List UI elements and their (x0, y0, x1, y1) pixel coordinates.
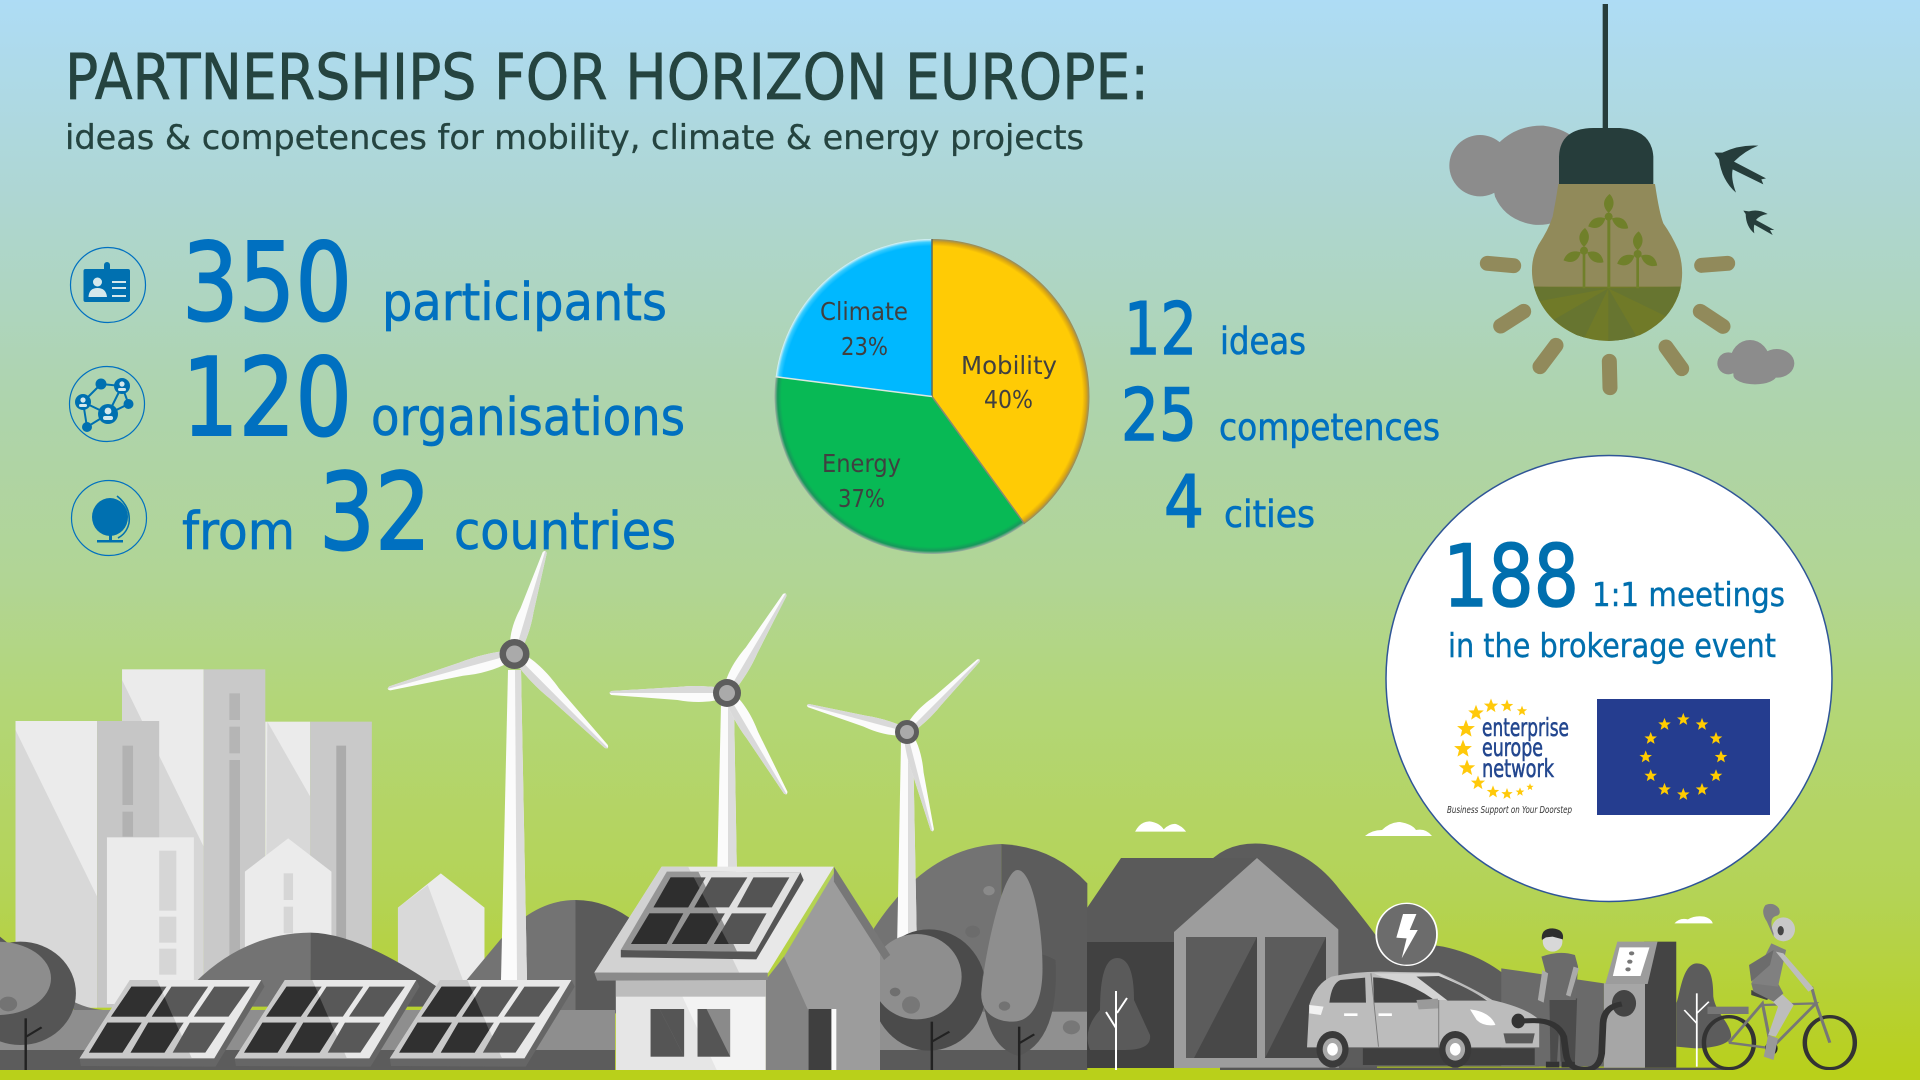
ground line (1220, 1068, 1724, 1070)
stat: 25 competences: competences (1219, 406, 1440, 449)
label: energy: 37% (838, 484, 885, 513)
logo: enterprise europe network: network (1482, 754, 1554, 783)
flag: European Union (1597, 699, 1770, 815)
stat: 120 organisations: organisations (371, 388, 685, 448)
stat: 350 participants: participants (382, 273, 667, 333)
hill: middle (465, 900, 637, 1013)
label: mobility: Mobility (961, 351, 1057, 380)
barn doors (1186, 937, 1326, 1058)
house door (809, 1009, 836, 1070)
stat: from 32 countries: 32 (319, 451, 431, 574)
stat: 12 ideas: ideas (1220, 320, 1306, 363)
barn dark block (1087, 858, 1260, 1070)
stat: from 32 countries: from (182, 502, 295, 562)
bicycle and cyclist (1704, 904, 1855, 1069)
solar panel 2 (235, 980, 420, 1067)
solar panel 3 (390, 980, 575, 1067)
cord (1603, 4, 1608, 129)
label: climate (820, 297, 908, 361)
stat: 188 meetings: 1:1 meetings (1592, 575, 1785, 614)
hill: left (73, 933, 437, 1013)
bulb light rays (1487, 263, 1728, 388)
building: right (265, 722, 372, 988)
wind turbine 2 (609, 588, 795, 880)
car (1307, 972, 1539, 1068)
label: energy (822, 449, 901, 513)
bulb cap (1559, 128, 1653, 184)
icon: organisations network (70, 366, 144, 442)
wind turbine 3 (805, 654, 984, 950)
swallow large (1714, 145, 1766, 193)
cloud: white small right (1674, 916, 1713, 923)
label: climate: 23% (841, 332, 888, 361)
slice: climate (776, 239, 932, 396)
illustration: house with roof solar panel and trees (594, 821, 1186, 1070)
plug (1512, 1014, 1525, 1028)
bulb windmills (1562, 194, 1660, 288)
building: tall centre (122, 669, 265, 1003)
icon: globe (72, 480, 146, 556)
cloud: white small centre (1135, 821, 1186, 832)
hill: behind car (1338, 891, 1539, 1067)
barn gable (1174, 858, 1339, 1068)
subtitle: ideas & competences for mobility, climate & energy projects (65, 118, 1084, 158)
illustration: city skyline and solar panels (0, 669, 637, 1070)
stat: 12 ideas (1124, 287, 1306, 371)
logo: enterprise europe network: enterprise (1482, 713, 1569, 742)
ground bands (0, 1010, 615, 1070)
logo: enterprise europe network: Business Support on Your Doorstep (1447, 805, 1572, 816)
stat: from 32 countries (182, 451, 676, 574)
stat: 188 meetings: 188 (1443, 527, 1579, 627)
stat: 12 ideas: 12 (1124, 287, 1197, 371)
cloud: small grey (1717, 340, 1794, 384)
stat: 25 competences: 25 (1121, 373, 1197, 457)
stat: 4 cities (1164, 460, 1315, 544)
charging cable (1519, 1004, 1622, 1069)
bush and sapling (1676, 963, 1731, 1067)
house roof (594, 867, 834, 981)
tree: round (872, 929, 986, 1070)
stat: 350 participants (182, 221, 667, 346)
illustration: light bulb with clouds and swallows (1449, 4, 1794, 388)
stat: 350 participants: 350 (182, 221, 352, 346)
slice: energy (774, 377, 1025, 554)
logo: enterprise europe network (1447, 698, 1572, 816)
house front wall (616, 980, 766, 1070)
stat: 4 cities: 4 (1164, 460, 1204, 544)
stat: 25 competences (1121, 373, 1440, 457)
icon: participant badge (70, 248, 146, 322)
building: house front (245, 838, 331, 960)
pie chart (774, 239, 1089, 554)
icon: lightning charge (1376, 903, 1437, 965)
roof solar panel (621, 872, 804, 959)
stat: 188 meetings (1443, 527, 1785, 627)
hill: behind barn (1204, 844, 1377, 1068)
solar panel 1 (80, 980, 264, 1067)
stat: 120 organisations (182, 336, 685, 461)
cloud: white near circle (1365, 822, 1432, 836)
house windows (651, 1009, 730, 1057)
swallow small (1743, 210, 1774, 235)
label: mobility (961, 351, 1057, 414)
tree: left (0, 937, 76, 1070)
building: small house (398, 873, 484, 987)
cloud: large grey (1449, 126, 1580, 225)
man (1538, 928, 1579, 1067)
wind turbine 1 (385, 548, 615, 980)
house side wall (766, 867, 890, 1070)
tree: tall (981, 870, 1080, 1070)
hill: behind trees (874, 844, 1087, 1017)
stat: from 32 countries: countries (454, 502, 676, 562)
building: left (16, 721, 159, 1008)
label: energy: Energy (822, 449, 901, 478)
callout: brokerage event circle (1386, 456, 1832, 902)
bulb ground (1534, 286, 1681, 341)
bulb body (1532, 184, 1682, 341)
illustration: barn with big doors (1087, 844, 1377, 1070)
stat: 4 cities: cities (1224, 493, 1315, 536)
logo: enterprise europe network: europe (1482, 733, 1543, 762)
ground bands right of house (879, 1012, 1087, 1070)
illustration: electric car, charger, man and cyclist (1220, 891, 1855, 1070)
charging station (1604, 942, 1676, 1068)
slice: mobility (932, 239, 1089, 524)
text: in the brokerage event: in the brokerage event (1448, 626, 1776, 665)
stat: 120 organisations: 120 (182, 336, 352, 461)
bottom ground band (0, 1070, 1920, 1080)
title: PARTNERSHIPS FOR HORIZON EUROPE: (65, 41, 1149, 114)
label: mobility: 40% (984, 385, 1033, 414)
building: front tower (107, 837, 194, 1004)
backdrop behind man (1501, 968, 1604, 1067)
label: climate: Climate (820, 297, 908, 326)
